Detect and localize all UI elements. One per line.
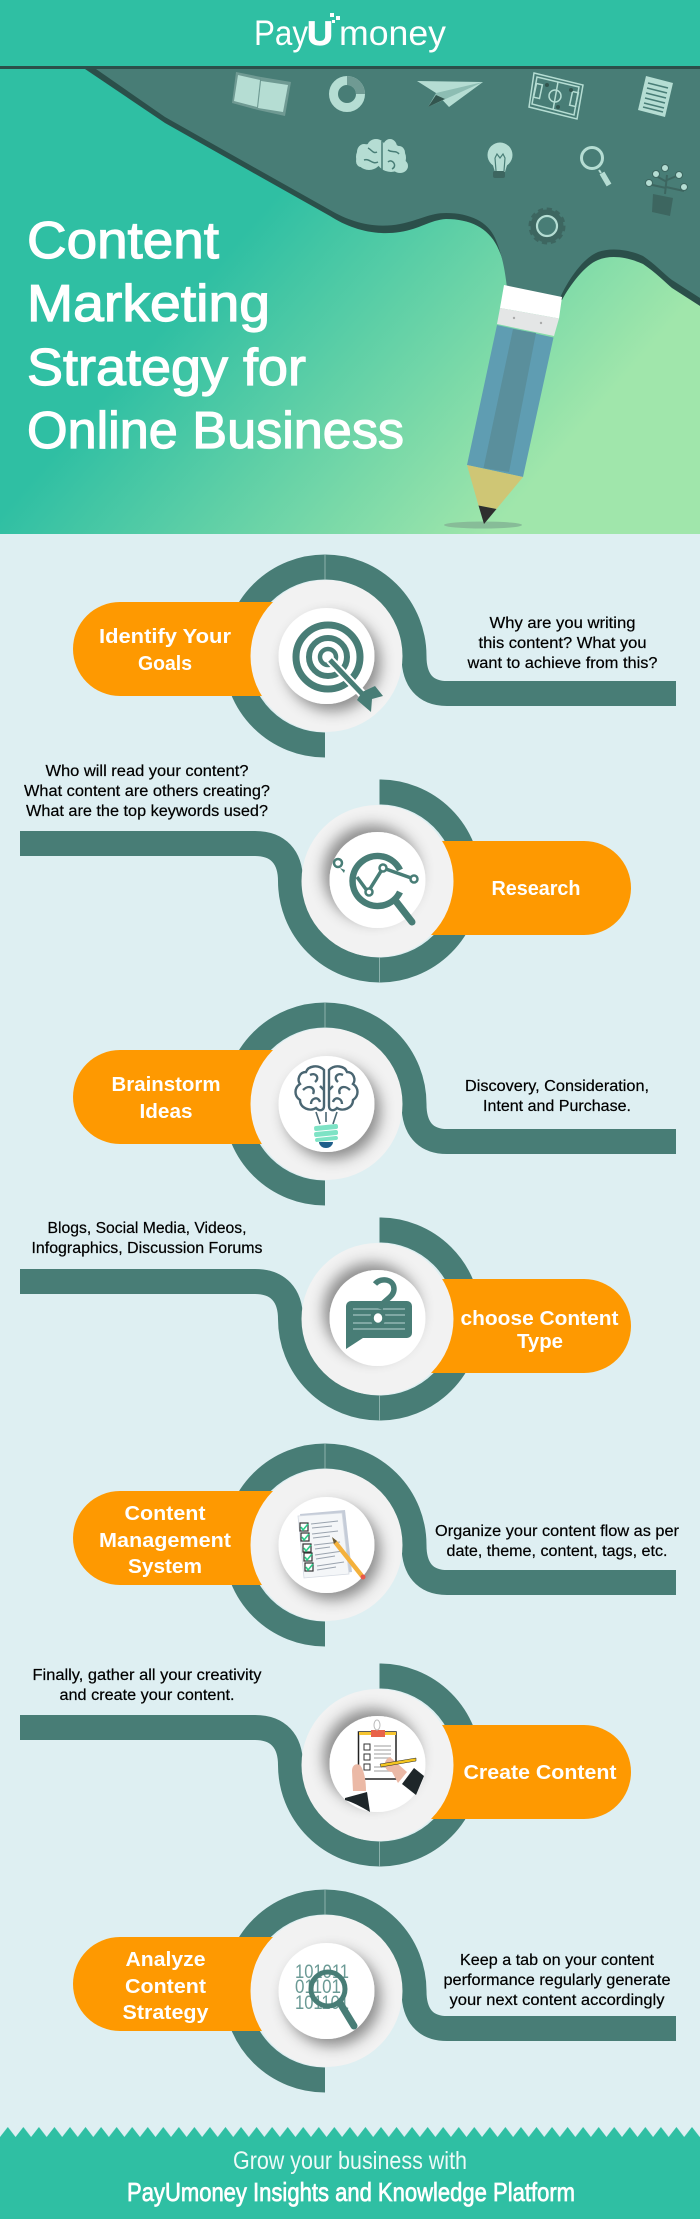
icon: brain	[356, 139, 408, 173]
label: Identify Your Goals	[99, 626, 231, 675]
label: Create Content: Create Content	[464, 1762, 617, 1784]
label: choose Content Type: choose Content	[460, 1308, 619, 1330]
label: Brainstorm Ideas: Ideas	[140, 1101, 192, 1123]
icon: magnifier	[582, 148, 609, 185]
icon: binary magnifier	[295, 1962, 354, 2026]
description	[435, 1523, 679, 1560]
step 3: brainstorm ideas	[73, 1002, 676, 1193]
description	[32, 1667, 262, 1704]
label: Analyze Content Strategy	[122, 1949, 209, 2024]
icon: hands writing on clipboard	[345, 1720, 424, 1812]
pencil	[444, 285, 562, 528]
footer banner	[0, 2127, 700, 2219]
icon: light bulb	[488, 142, 512, 178]
icon: brain bulb	[296, 1066, 358, 1148]
description: your next content accordingly	[450, 1992, 665, 2009]
description: Why are you writing	[490, 615, 636, 632]
label: Analyze Content Strategy: Content	[125, 1976, 206, 1998]
icon: target with arrow	[296, 625, 383, 712]
description	[32, 1220, 263, 1257]
icon: paper plane	[417, 81, 483, 107]
step 5: content management system	[73, 1443, 679, 1634]
logo: PayUmoney: Pay	[254, 14, 308, 53]
icon: document	[638, 76, 673, 117]
logo: PayUmoney: U	[307, 15, 333, 53]
description	[444, 1952, 670, 2009]
icon: question speech bubble	[346, 1280, 412, 1349]
label: Analyze Content Strategy: Analyze	[126, 1949, 206, 1971]
footer text: PayUmoney Insights and Knowledge Platform	[127, 2177, 575, 2207]
hero panel	[0, 69, 700, 534]
description	[466, 615, 658, 672]
label: Brainstorm Ideas	[112, 1074, 220, 1123]
description: Blogs, Social Media, Videos,	[48, 1220, 246, 1237]
label: Brainstorm Ideas: Brainstorm	[112, 1074, 220, 1096]
title: Content	[27, 212, 220, 270]
icon: binary magnifier: 01101	[295, 1977, 341, 1998]
description: performance regularly generate	[444, 1972, 670, 1989]
label: choose Content Type	[460, 1308, 619, 1353]
description: Intent and Purchase.	[483, 1098, 631, 1115]
label: Identify Your Goals: Goals	[138, 653, 192, 675]
step 6: create content	[20, 1667, 631, 1867]
description: Organize your content flow as per	[435, 1523, 679, 1540]
icon: gear	[530, 210, 564, 242]
icon: donut chart	[334, 80, 360, 108]
label: Analyze Content Strategy: Strategy	[122, 2002, 209, 2024]
label: Content Management System: Management	[99, 1530, 231, 1552]
label: Content Management System	[99, 1503, 231, 1578]
icon: checklist with pencil	[298, 1510, 366, 1580]
description	[465, 1078, 649, 1115]
description: and create your content.	[60, 1687, 234, 1704]
description: Infographics, Discussion Forums	[32, 1240, 263, 1257]
label: Research: Research	[492, 878, 580, 900]
icon: binary magnifier: 101011	[295, 1962, 349, 1983]
step 2: research	[20, 763, 631, 983]
title: Marketing	[27, 275, 270, 333]
ink splash shape	[85, 69, 700, 306]
icon: magnifier with graph	[334, 856, 418, 922]
step 4: choose content type	[20, 1220, 631, 1421]
description: Who will read your content?	[46, 763, 249, 780]
footer text: Grow your business with	[233, 2147, 467, 2175]
description: What content are others creating?	[24, 783, 270, 800]
description: What are the top keywords used?	[26, 803, 268, 820]
title	[27, 212, 404, 460]
label: choose Content Type: Type	[517, 1331, 563, 1353]
header bar with logo	[0, 0, 700, 69]
description: Discovery, Consideration,	[465, 1078, 649, 1095]
footer text	[127, 2147, 575, 2207]
label: Identify Your Goals: Identify Your	[99, 626, 231, 648]
description: Keep a tab on your content	[460, 1952, 655, 1969]
title: Strategy for	[27, 339, 306, 397]
step 7: analyze content strategy	[73, 1889, 676, 2080]
logo: PayUmoney	[254, 13, 446, 53]
description: date, theme, content, tags, etc.	[446, 1543, 668, 1560]
label: Content Management System: Content	[124, 1503, 206, 1525]
title: Online Business	[27, 402, 404, 460]
icon: strategy board	[529, 73, 583, 119]
description: Finally, gather all your creativity	[32, 1667, 262, 1684]
description: want to achieve from this?	[466, 655, 658, 672]
icon: binary magnifier: 101101	[295, 1993, 349, 2014]
logo: PayUmoney: money	[339, 14, 446, 53]
icon: idea plant	[646, 164, 688, 216]
description	[24, 763, 270, 820]
label: Content Management System: System	[128, 1556, 202, 1578]
icon: open book	[232, 72, 291, 116]
description: this content? What you	[478, 635, 646, 652]
step 1: identify your goals	[73, 554, 676, 745]
